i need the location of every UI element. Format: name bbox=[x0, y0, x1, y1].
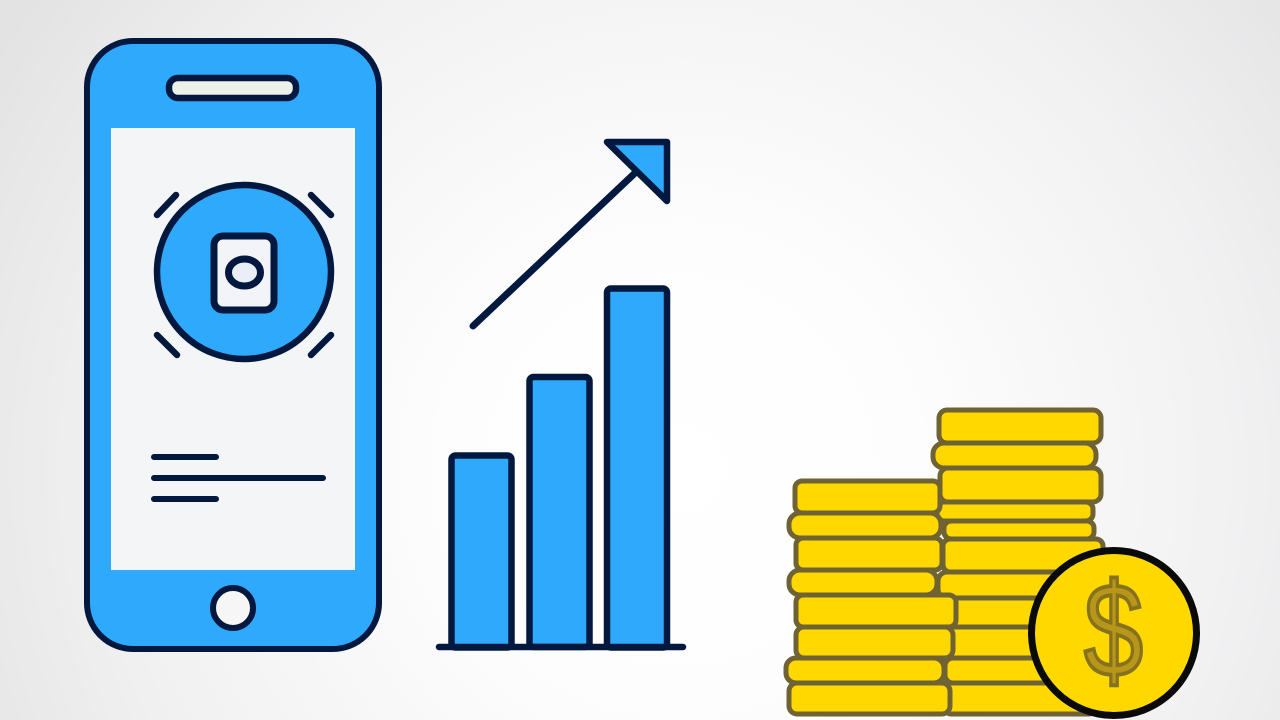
bar 2 bbox=[530, 377, 590, 647]
focus ticks bbox=[157, 195, 331, 355]
camera frame bbox=[214, 236, 274, 310]
bar chart bbox=[439, 288, 683, 648]
camera lens bbox=[228, 259, 260, 286]
camera circle bbox=[157, 185, 331, 359]
phone speaker bbox=[169, 78, 296, 98]
coin stacks bbox=[786, 410, 1103, 714]
bar 1 bbox=[452, 456, 512, 648]
arrow head bbox=[607, 142, 667, 201]
phone body bbox=[87, 41, 379, 649]
coin disc bbox=[1032, 550, 1196, 716]
dollar sign: $ bbox=[1084, 556, 1143, 705]
bar 3 bbox=[607, 288, 667, 648]
arrow shaft bbox=[473, 172, 636, 326]
chart baseline bbox=[439, 644, 683, 650]
camera icon bbox=[157, 185, 331, 359]
phone illustration bbox=[87, 41, 379, 649]
phone screen bbox=[111, 128, 355, 570]
dollar coin bbox=[1032, 550, 1196, 716]
home button bbox=[213, 588, 253, 628]
text lines bbox=[154, 457, 323, 499]
growth arrow bbox=[473, 142, 667, 326]
right coin stack bbox=[933, 410, 1103, 714]
left coin stack bbox=[786, 481, 956, 714]
